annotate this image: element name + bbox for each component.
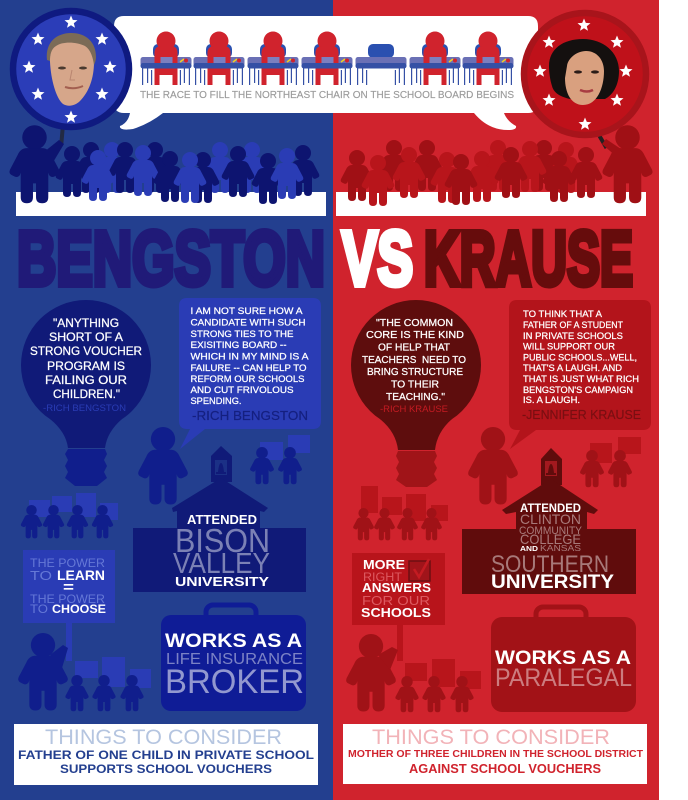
box text: [190, 306, 309, 407]
quote text: PROGRAM IS: [47, 359, 125, 373]
briefcase: Bengston job: LIFE INSURANCE: [166, 651, 303, 668]
supporters with signs: left of Bengston school: [21, 493, 118, 538]
panel: things to consider, Bengston: SUPPORTS SCHOOL VOUCHERS: [60, 762, 272, 776]
quote text: "ANYTHING: [53, 316, 119, 330]
panel: things to consider, Krause: MOTHER OF THREE CHILDREN IN THE SCHOOL DISTRICT: [348, 749, 643, 760]
box text: FAILURE -- CAN HELP TO: [190, 363, 306, 374]
box text: REFORM OUR SCHOOLS: [190, 374, 304, 385]
school text: SOUTHERN: [491, 551, 609, 578]
quote text: OF HELP THAT: [378, 342, 451, 354]
icon: checkbox: [409, 559, 430, 581]
supporters with signs: left of Krause school: [353, 486, 448, 540]
box attribution: -RICH BENGSTON: [192, 408, 308, 423]
face: Jennifer Krause: [549, 39, 619, 105]
quote text: TEACHING.": [386, 391, 445, 403]
protest sign: more right answers: ANSWERS: [362, 580, 431, 595]
quote text: "THE COMMON: [376, 317, 453, 329]
quote text: FAILING OUR: [45, 373, 127, 387]
school text: AND: [520, 544, 539, 553]
box text: STRONG TIES TO THE: [190, 329, 294, 340]
box text: IN PRIVATE SCHOOLS: [523, 331, 623, 342]
briefcase: Bengston job: BROKER: [165, 663, 304, 701]
leader figure: Bengston side: [9, 125, 64, 203]
panel: things to consider, Bengston: THINGS TO CONSIDER: [45, 726, 282, 749]
box text: TO THINK THAT A: [523, 309, 603, 320]
face: Rich Bengston: [47, 33, 96, 106]
school text: CLINTON: [520, 511, 581, 527]
family with signs: Bengston: [18, 633, 151, 711]
protest sign: power to learn: THE POWER: [30, 592, 105, 606]
protest sign: more right answers: MORE: [363, 557, 405, 572]
speaker figure: Krause: [468, 427, 518, 504]
briefcase: Krause job: PARALEGAL: [495, 664, 632, 692]
box text: IS. A LAUGH.: [523, 395, 580, 406]
protest sign: power to learn: =: [63, 579, 74, 596]
box text: THAT'S A LAUGH. AND: [523, 363, 622, 374]
desks row: [140, 32, 514, 85]
protest sign: power to learn: LEARN: [57, 567, 105, 583]
protest sign: more right answers: SCHOOLS: [361, 605, 431, 620]
crowd bar: Bengston side: [16, 192, 326, 216]
box text: I AM NOT SURE HOW A: [190, 306, 303, 317]
box attribution: -JENNIFER KRAUSE: [522, 407, 641, 422]
protest sign: power to learn: THE POWER: [30, 556, 105, 570]
quote text: [362, 317, 466, 403]
school text: ATTENDED: [520, 501, 581, 515]
protest sign: more right answers: [352, 553, 445, 661]
briefcase: Bengston job: WORKS AS A: [165, 631, 302, 652]
quote attribution: -RICH KRAUSE: [380, 404, 448, 415]
bubble caption: THE RACE TO FILL THE NORTHEAST CHAIR ON THE SCHOOL BOARD BEGINS: [140, 90, 514, 101]
protest sign: power to learn: CHOOSE: [52, 602, 106, 616]
box text: SPENDING.: [190, 396, 242, 407]
light bulb quote: Bengston: [21, 300, 151, 486]
panel: things to consider, Bengston: FATHER OF ONE CHILD IN PRIVATE SCHOOL: [18, 748, 314, 762]
box text: [523, 309, 639, 406]
box text: WHICH IN MY MIND IS A: [190, 352, 309, 362]
box text: BENGSTON'S CAMPAIGN: [523, 385, 633, 396]
school text: UNIVERSITY: [491, 572, 614, 593]
school text: UNIVERSITY: [175, 574, 269, 589]
protest sign: power to learn: TO: [30, 568, 52, 583]
panel: things to consider, Krause: AGAINST SCHOOL VOUCHERS: [409, 762, 601, 776]
speaker figure: Bengston: [138, 427, 188, 504]
crowd: Krause supporters: [341, 140, 602, 206]
quote attribution: -RICH BENGSTON: [43, 403, 126, 414]
school text: [491, 501, 614, 593]
protest sign: power to learn: TO: [30, 602, 48, 616]
crowd bar: Krause side: [336, 192, 646, 216]
family with signs: Krause: [346, 634, 481, 712]
panel: things to consider, Krause: THINGS TO CONSIDER: [372, 726, 610, 749]
supporters with signs: top right of Krause school: [580, 437, 641, 487]
quote text: SHORT OF A: [49, 330, 123, 344]
briefcase: Krause job: [491, 607, 636, 712]
leader figure: Krause side: [602, 125, 653, 203]
crowd: Bengston supporters: [56, 142, 319, 204]
box text: THAT IS JUST WHAT RICH: [523, 374, 639, 385]
panel: blue background: [0, 0, 333, 800]
protest sign: more right answers: RIGHT: [363, 570, 403, 584]
box text: AND CUT FRIVOLOUS: [190, 385, 294, 396]
panel: things to consider, Krause: [343, 724, 647, 784]
school text: [173, 512, 270, 589]
panel: red background: [333, 0, 659, 800]
title: VS: VS: [342, 216, 413, 302]
protest sign: power to learn: [23, 550, 115, 661]
quote text: [30, 316, 142, 401]
magnifier portrait: Bengston: [13, 11, 129, 144]
school text: COLLEGE: [520, 531, 581, 547]
speech bubble with desks: [114, 16, 538, 130]
school text: VALLEY: [173, 548, 270, 580]
light bulb quote: Krause: [351, 300, 481, 487]
school text: KANSAS: [540, 544, 581, 553]
schoolhouse: Krause: [462, 448, 636, 594]
title: BENGSTON: BENGSTON: [17, 216, 325, 302]
school text: BISON: [175, 522, 270, 559]
school text: ATTENDED: [187, 512, 257, 527]
protest sign: more right answers: FOR OUR: [362, 593, 430, 608]
box text: CANDIDATE WITH SUCH: [190, 318, 306, 328]
speech box quote: Bengston: [179, 298, 321, 449]
quote text: BRING STRUCTURE: [367, 366, 463, 378]
briefcase: Krause job: WORKS AS A: [495, 648, 631, 669]
quote text: CHILDREN.": [53, 387, 120, 401]
school text: COMMUNITY: [519, 525, 583, 537]
quote text: CORE IS THE KIND: [366, 329, 464, 341]
magnifier portrait: Krause: [524, 13, 646, 149]
quote text: STRONG VOUCHER: [30, 344, 142, 358]
quote text: TEACHERS NEED TO: [362, 354, 466, 366]
box text: WILL SUPPORT OUR: [523, 342, 615, 352]
box text: FATHER OF A STUDENT: [523, 320, 623, 331]
briefcase: Bengston job: [161, 605, 306, 711]
panel: things to consider, Bengston: [14, 724, 318, 785]
speech box quote: Krause: [509, 300, 651, 449]
supporters with signs: top right of Bengston school: [250, 435, 310, 484]
box text: EXISITING BOARD --: [190, 340, 286, 351]
quote text: TO THEIR: [391, 378, 439, 390]
box text: PUBLIC SCHOOLS...WELL,: [523, 352, 637, 364]
schoolhouse: Bengston: [133, 446, 306, 592]
